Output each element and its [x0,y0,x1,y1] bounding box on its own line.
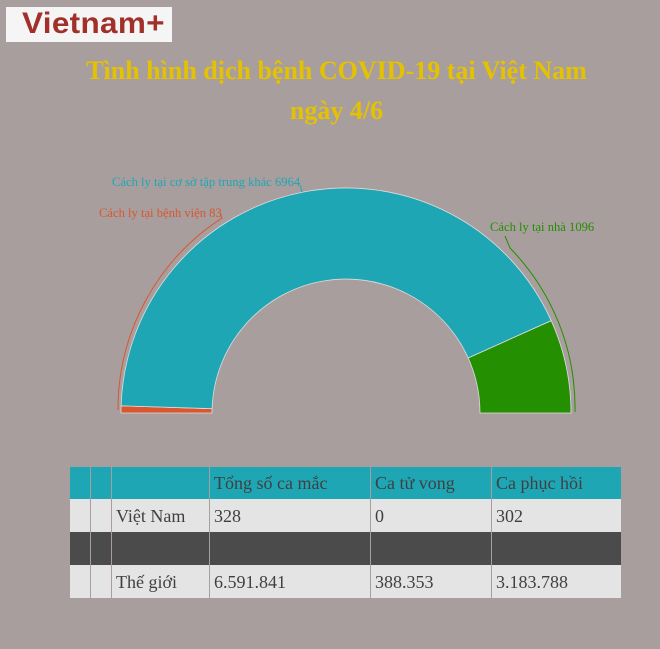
table: 6.591.841 [214,572,286,592]
logo: Vietnam+ [22,7,165,40]
title: Tình hình dịch bệnh COVID-19 tại Việt Nam [86,56,587,85]
leader lines [118,213,222,410]
table: Tổng số ca mắc [214,473,327,493]
table: 3.183.788 [496,572,568,592]
table: Ca tử vong [375,473,455,493]
labels: Cách ly tại cơ sở tập trung khác 6964 [112,175,301,189]
donut chart [99,175,594,414]
segment: home [468,321,571,413]
donut chart: Cách ly tại bệnh viện 83 [99,206,222,220]
title [86,56,587,125]
table: 388.353 [375,572,434,592]
table [70,467,621,598]
title: ngày 4/6 [290,96,383,125]
table: 328 [214,506,241,526]
table: 0 [375,506,384,526]
table: Việt Nam [116,506,185,526]
donut chart: Cách ly tại nhà 1096 [490,220,594,234]
header row [70,467,621,499]
segment: hospital [121,406,212,413]
table: Thế giới [116,572,177,592]
table: Ca phục hồi [496,473,583,493]
table: 302 [496,506,523,526]
segment: other [121,188,551,409]
